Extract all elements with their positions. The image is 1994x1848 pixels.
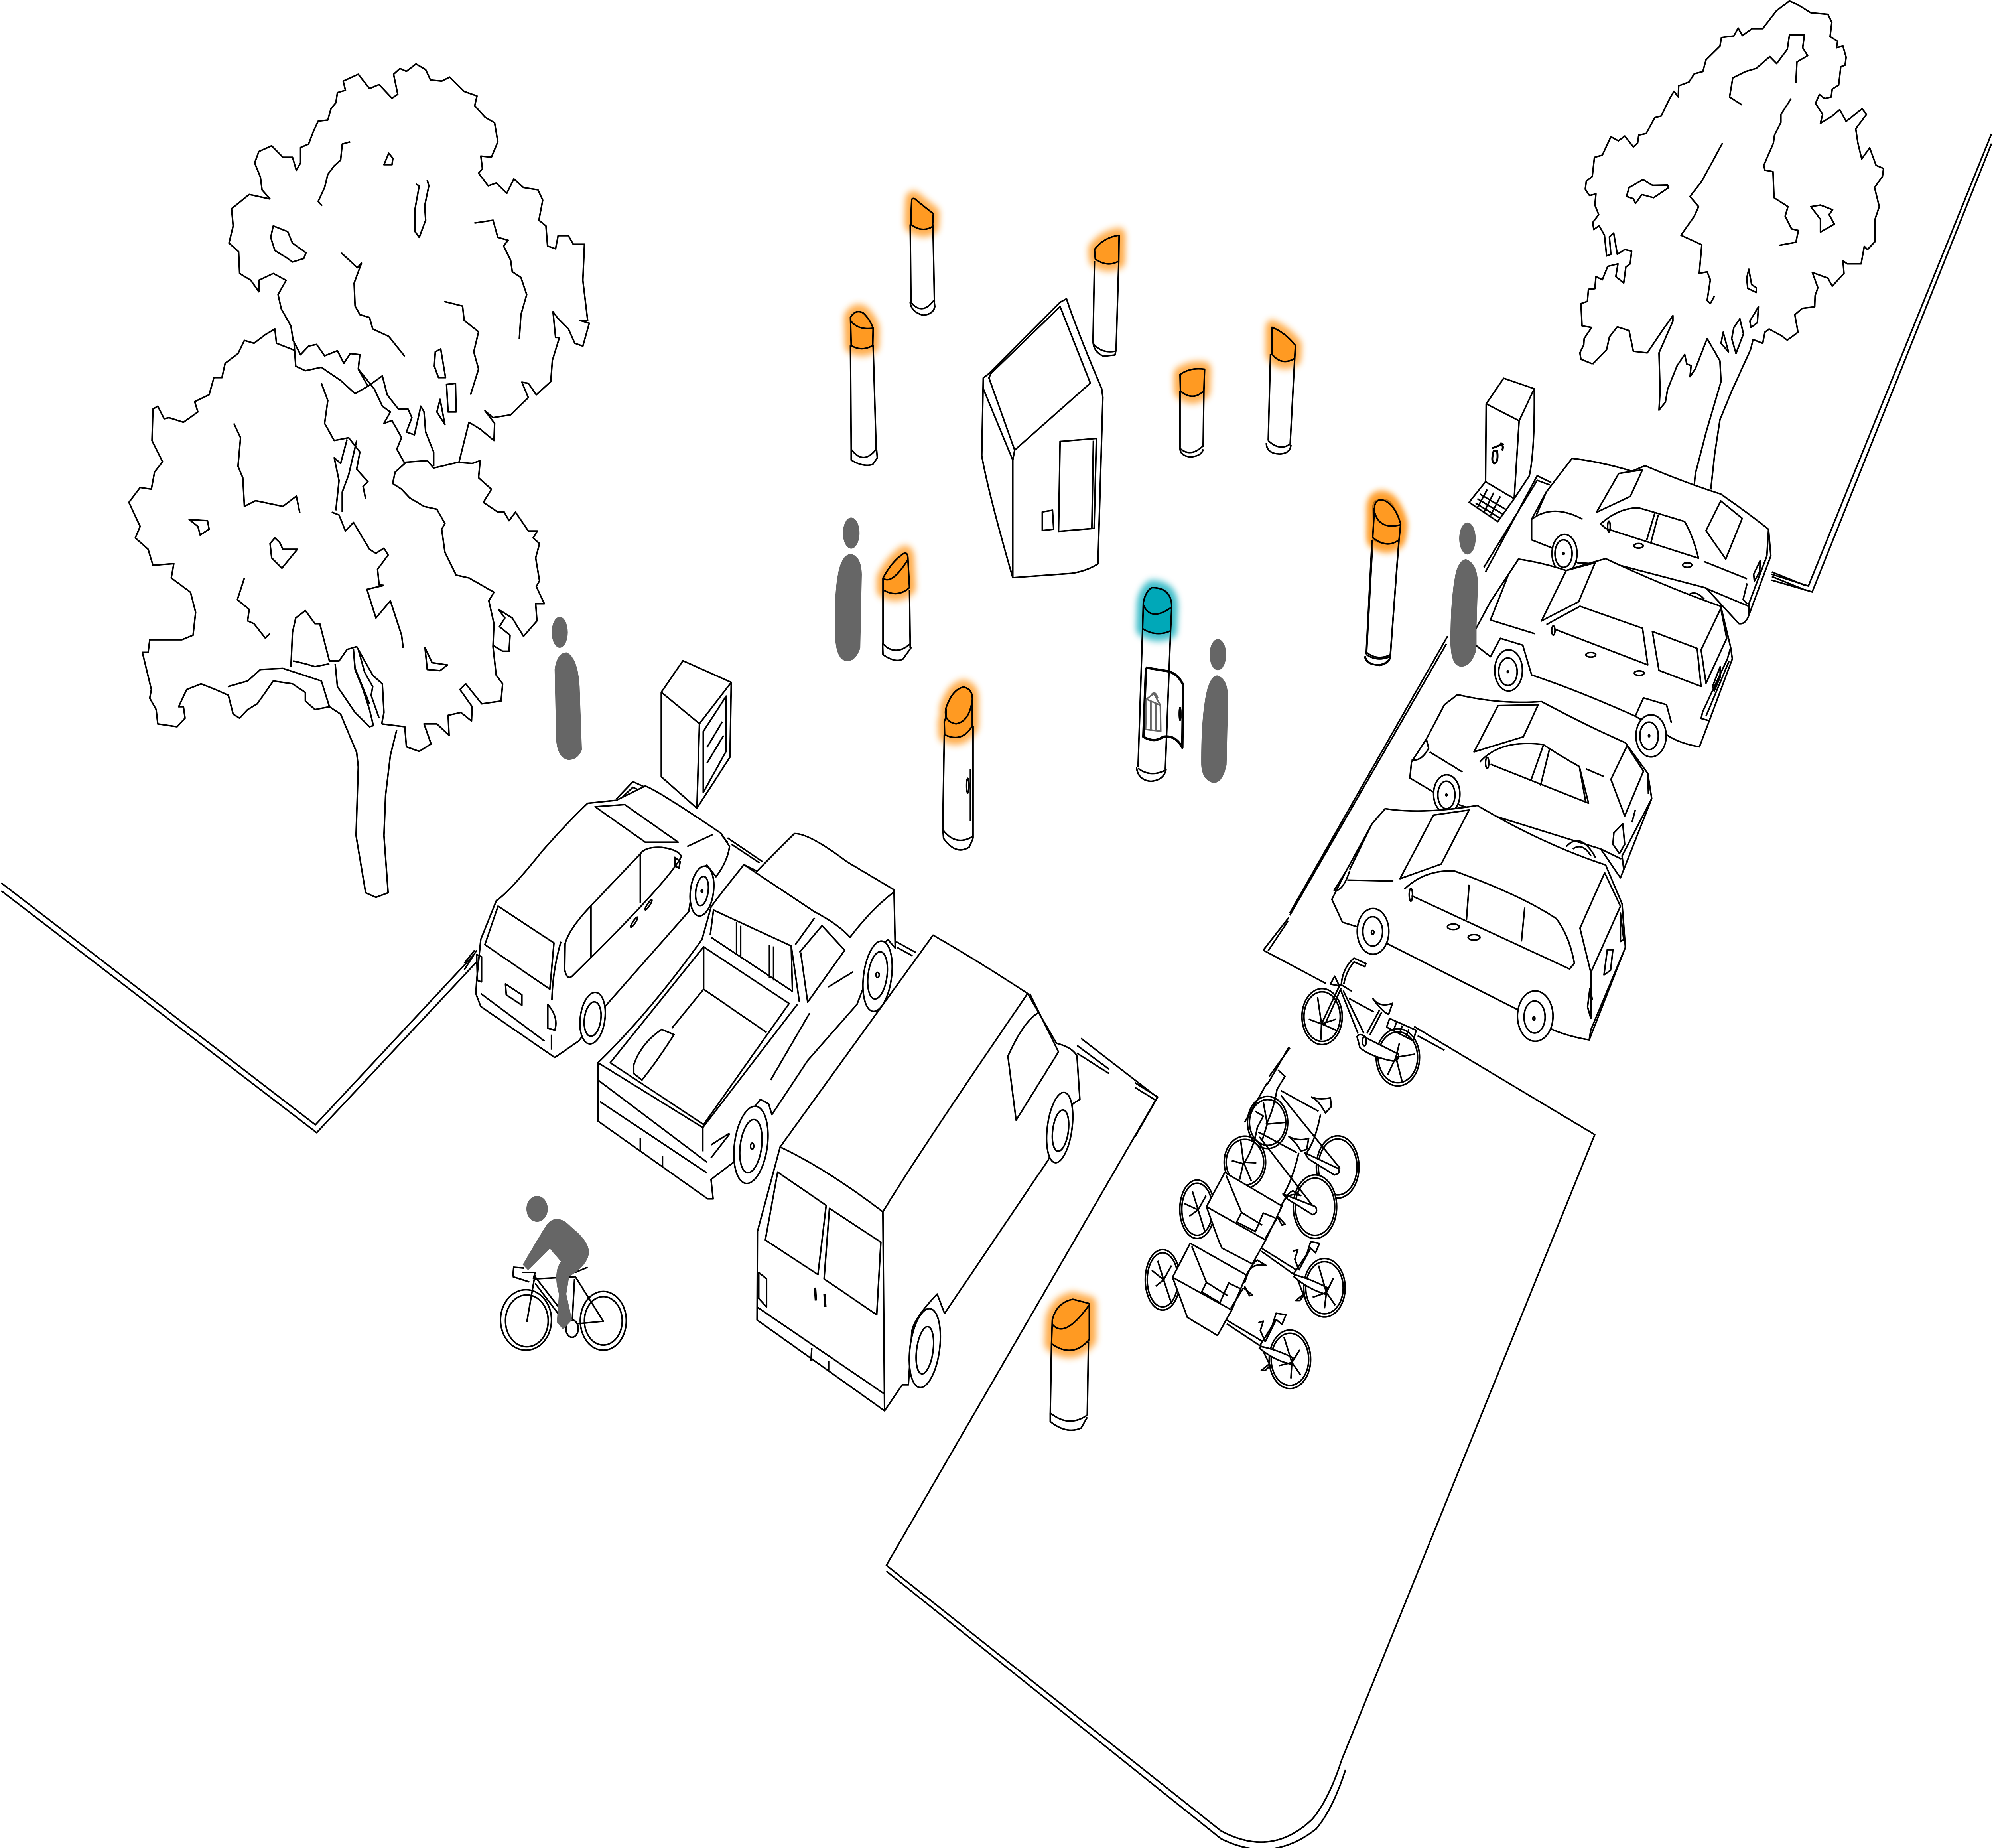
car 4 <box>1332 805 1626 1041</box>
car 1 <box>1532 458 1771 624</box>
bollard 7 <box>883 553 911 661</box>
white SUV <box>476 786 729 1057</box>
car 3 <box>1410 694 1652 878</box>
ground behind right cars <box>1290 476 1806 915</box>
box: left service cabinet <box>661 661 731 808</box>
bollard 5 <box>1266 327 1295 454</box>
person: by right cars <box>1450 523 1478 667</box>
bicycle <box>500 1267 627 1350</box>
bollard 8 <box>943 687 973 850</box>
center group: bollards, kiosk and people <box>835 199 1401 850</box>
bollard 9 <box>1365 500 1401 665</box>
water cabinet with grate <box>1469 378 1534 522</box>
bollard 3 <box>1093 235 1119 356</box>
bike: parked lower <box>1224 1083 1337 1239</box>
cargo bike lower <box>1145 1243 1310 1388</box>
bike: share bike by curb <box>1302 958 1420 1086</box>
bollard 10: bottom <box>1050 1299 1089 1430</box>
person: near bollard 7 <box>835 518 862 661</box>
bike: parked upper <box>1247 1047 1359 1198</box>
tree: right <box>1580 1 1884 489</box>
bollard 4 <box>1180 369 1205 457</box>
cyclist <box>500 1196 627 1350</box>
icon: tap <box>1492 443 1503 463</box>
cargo bike upper <box>1180 1172 1345 1317</box>
car 2 <box>1476 559 1732 757</box>
bollard 1 <box>910 199 935 315</box>
bollard 6 <box>1365 499 1401 665</box>
tree: left <box>129 64 589 897</box>
person: by teal bollard <box>1201 639 1228 783</box>
right group: cabinet, bollard, parked cars <box>1290 378 1806 1041</box>
bollard 2 <box>850 312 877 465</box>
teal delivery bollard with open door <box>1137 588 1183 781</box>
ground behind left cars <box>464 782 1109 1073</box>
bicycles group <box>1135 917 1444 1388</box>
icon: parcel <box>1146 693 1161 731</box>
left parking group <box>464 782 1109 1430</box>
kiosk house <box>982 299 1103 578</box>
person: by left tree <box>552 617 582 760</box>
van <box>757 935 1080 1411</box>
rider <box>523 1196 589 1329</box>
pickup truck <box>598 834 896 1199</box>
ground line pieces <box>1135 917 1444 1137</box>
